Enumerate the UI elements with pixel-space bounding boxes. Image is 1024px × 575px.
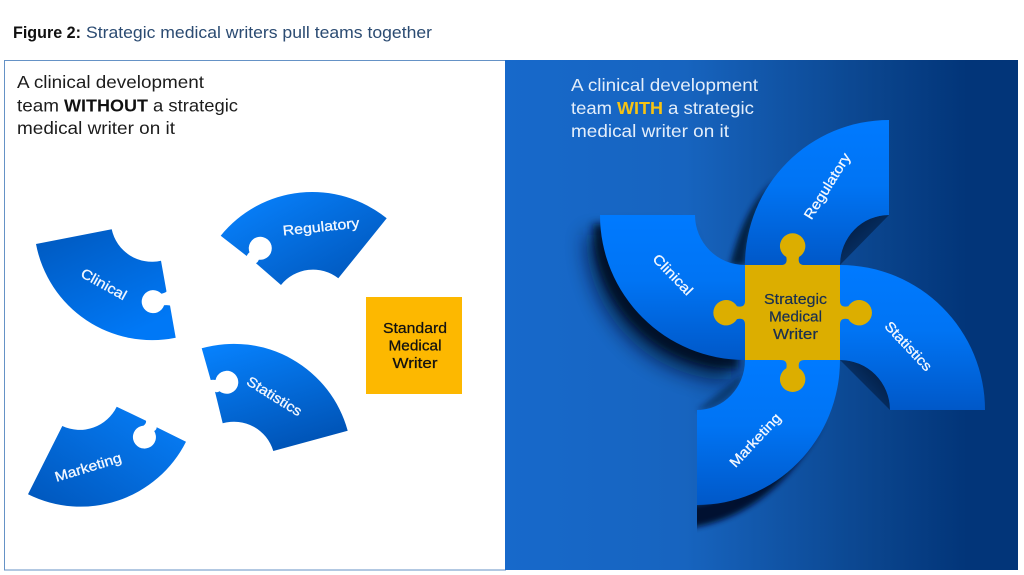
standard medical writer box: Medical — [388, 338, 442, 354]
puzzle piece: Regulatory: Regulatory — [282, 215, 360, 238]
panel: without a strategic medical writer — [4, 60, 506, 570]
blade: Statistics: Statistics — [882, 318, 935, 374]
puzzle piece: Statistics: Statistics — [244, 373, 305, 419]
heading: with: A clinical development — [571, 75, 758, 95]
puzzle piece: Statistics — [202, 344, 348, 451]
heading: without: A clinical development — [17, 72, 204, 92]
heading: without: a strategic — [153, 96, 238, 116]
blade shadows — [586, 180, 890, 528]
standard medical writer box: Writer — [392, 356, 438, 372]
heading: without: team — [17, 96, 59, 116]
panel: with a strategic medical writer — [505, 60, 1018, 570]
heading: without: medical writer on it — [17, 118, 175, 138]
blade: Statistics — [840, 265, 985, 410]
blade: Marketing: Marketing — [726, 410, 784, 470]
heading: without: WITHOUT — [64, 96, 148, 116]
blade: Clinical: Clinical — [650, 251, 696, 298]
title: Strategic medical writers pull teams together — [86, 24, 433, 42]
heading: with: a strategic — [668, 98, 754, 118]
standard medical writer box — [366, 297, 462, 394]
strategic medical writer puzzle piece — [713, 233, 872, 392]
puzzle piece: Regulatory — [221, 192, 387, 285]
puzzle piece: Marketing — [28, 407, 186, 507]
blade: Marketing — [697, 360, 840, 505]
heading: with: medical writer on it — [571, 121, 729, 141]
blade: Regulatory: Regulatory — [800, 150, 854, 222]
puzzle piece: Clinical — [36, 229, 176, 340]
strategic medical writer puzzle piece: Strategic — [764, 292, 827, 308]
strategic medical writer puzzle piece: Writer — [773, 327, 818, 343]
standard medical writer box: Standard — [383, 321, 447, 337]
heading: with — [571, 75, 758, 141]
heading: with: team — [571, 98, 612, 118]
puzzle piece: Marketing: Marketing — [53, 449, 123, 485]
title: Figure 2: — [13, 24, 81, 42]
heading: with: WITH — [617, 98, 663, 118]
heading: without — [17, 72, 238, 138]
puzzle piece: Clinical: Clinical — [78, 265, 130, 303]
blade: Clinical — [600, 215, 745, 360]
strategic medical writer puzzle piece: Medical — [769, 310, 822, 326]
blade: Regulatory — [745, 120, 889, 265]
